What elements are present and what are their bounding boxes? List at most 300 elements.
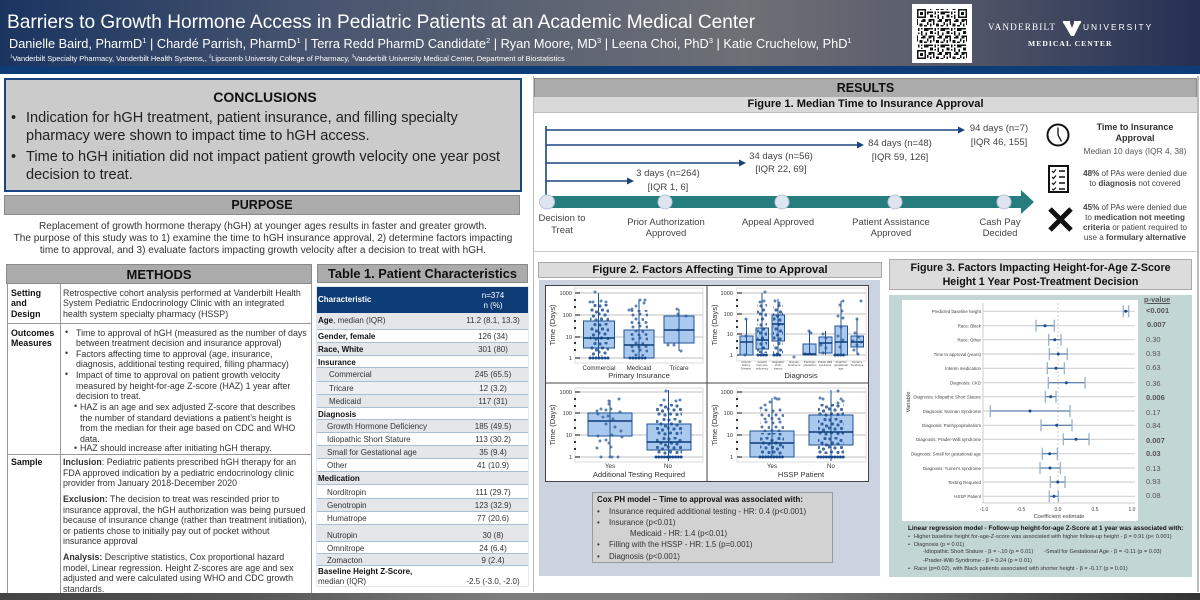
row: norditropin <box>317 485 528 499</box>
timeline value labels: [IQR 59, 126] <box>872 152 928 163</box>
outcomes list: • <box>65 348 68 358</box>
panel: methods heading <box>6 264 312 284</box>
variable labels: Testing Required <box>948 480 982 485</box>
chart: additional testing required: Additional Testing Required <box>593 470 685 479</box>
p-value list: <0.001 <box>1146 306 1169 315</box>
timeline value labels: Approved <box>646 228 686 239</box>
row: small for gestational age <box>317 446 528 459</box>
row: zomacton: 9 (2.4) <box>481 556 505 565</box>
variable labels: Race: Other <box>957 338 982 342</box>
denial diagnosis text: to diagnosis not covered <box>1089 179 1181 188</box>
chart: diagnosis: 1 <box>730 353 733 359</box>
chart: primary insurance: Commercial <box>582 365 616 372</box>
row: genotropin <box>317 499 528 512</box>
setting and design label: Setting <box>11 288 41 298</box>
row: commercial: 245 (65.5) <box>475 370 511 379</box>
point estimates <box>1030 311 1126 496</box>
timeline value labels: Treat <box>551 225 573 236</box>
outcomes list: diagnosis, additional testing required, filling pharmacy) <box>76 359 289 369</box>
purpose text: time to approval, and 3) evaluate factors impacting growth velocity after a decision to treat with hGH. <box>40 245 486 256</box>
chart: primary insurance: Primary Insurance <box>608 371 670 380</box>
chart: diagnosis: Noonan <box>789 360 799 364</box>
time to approval text <box>1084 122 1186 156</box>
teal timeline arrow <box>546 190 1034 214</box>
chart: diagnosis: Idiopathic <box>772 360 785 364</box>
panel: purpose heading: PURPOSE <box>231 198 293 212</box>
setting and design text <box>63 288 301 319</box>
sample label: Sample <box>11 457 42 467</box>
chart: diagnosis <box>710 288 866 380</box>
chart: HSSP patient <box>710 388 866 479</box>
regression bullets: Race (p=0.02), with Black patients associated with shorter height - β = -0.17 (p = 0.01) <box>914 566 1128 572</box>
p-value list: 0.08 <box>1146 491 1161 500</box>
figure 2 heading: Figure 2. Factors Affecting Time to Approval <box>592 264 828 276</box>
chart: diagnosis: Chronic <box>741 360 751 364</box>
row: nutropin: 30 (8) <box>483 531 503 540</box>
timeline value labels: 3 days (n=264) <box>636 168 700 179</box>
sample text: Inclusion: Pediatric patients prescribed hGH therapy for an <box>63 457 296 467</box>
row: nutropin <box>317 525 528 542</box>
p-value list: 0.03 <box>1146 449 1161 458</box>
sample text: insurance approval, the hGH authorization was being pursued <box>63 504 305 514</box>
p-value heading: p-value <box>1144 295 1170 304</box>
row: gender <box>317 330 528 343</box>
panel: results heading <box>534 78 1197 98</box>
chart: diagnosis: hormone <box>756 363 768 367</box>
chart: diagnosis: Small for <box>835 360 847 364</box>
row: idiopathic short stature: 113 (30.2) <box>475 435 511 444</box>
chart: diagnosis: 100 <box>724 312 733 318</box>
row: zomacton <box>317 554 528 566</box>
figure 3 heading: Figure 3. Factors Impacting Height-for-Age Z-Score <box>910 262 1171 274</box>
regression bullets: • <box>908 534 910 540</box>
Cox model callout <box>592 492 833 563</box>
p-value list: 0.006 <box>1146 393 1165 402</box>
row: tricare <box>317 382 528 395</box>
timeline value labels: 94 days (n=7) <box>970 123 1028 134</box>
outcomes list: Factors affecting time to approval (age, insurance, <box>76 349 272 359</box>
row: baseline height: Baseline Height Z-Score, <box>318 567 412 576</box>
outcomes label <box>11 328 54 348</box>
row: insurance: Insurance <box>318 358 356 367</box>
row: age: Age, median (IQR) <box>318 316 386 325</box>
Cox model callout: Filling with the HSSP - HR: 1.5 (p=0.001) <box>609 540 752 549</box>
row: medicaid <box>317 395 528 408</box>
setting and design text: System Pediatric Endocrinology Clinic with an integrated <box>63 298 284 308</box>
row: zomacton: Zomacton <box>327 556 363 565</box>
row: tricare: Tricare <box>329 384 354 393</box>
x axis labels: -0.5 <box>1017 507 1026 513</box>
chart: primary insurance: Time (Days) <box>548 304 557 346</box>
y axis title: Variable <box>906 392 912 412</box>
time to approval text: Time to Insurance <box>1097 122 1173 132</box>
outcomes list: measured by height-for-age Z-score (HAZ) 1 year after <box>76 380 290 390</box>
x axis labels: 0.0 <box>1055 507 1062 513</box>
p-value column <box>1144 295 1170 500</box>
Cox model callout: • <box>597 540 600 549</box>
x axis labels <box>980 507 1136 513</box>
sample text: Analysis: Descriptive statistics, Cox proportional hazard <box>63 552 284 562</box>
chart: primary insurance: Tricare <box>669 365 689 372</box>
timeline value labels: 84 days (n=48) <box>868 138 932 149</box>
timeline value labels <box>538 123 1028 239</box>
linear regression summary <box>908 524 1183 572</box>
panel frame rule under figure 1 <box>534 251 1197 252</box>
logo word University: UNIVERSITY <box>1083 22 1153 32</box>
chart: HSSP patient: No <box>827 463 836 470</box>
conclusions bullets: pharmacy were shown to impact time to hGH access. <box>26 128 370 144</box>
affiliations: 1Vanderbilt Specialty Pharmacy, Vanderbilt Health Systems,, 2Lipscomb University College of Pharmacy, 3Vanderbilt University Medical Center, Department of Biostatistics <box>10 53 565 63</box>
sample text: or patients chose to initially pay out of pocket without <box>63 526 269 536</box>
chart: additional testing required <box>548 388 703 479</box>
icon: X mark <box>1048 207 1073 232</box>
p-value list: 0.007 <box>1146 436 1165 445</box>
figure 1 heading <box>534 97 1197 113</box>
outcomes list: HAZ should increase after initiating hGH therapy. <box>80 443 272 453</box>
row: diagnosis: Diagnosis <box>318 410 356 419</box>
row: other: 41 (10.9) <box>477 461 509 470</box>
chart: additional testing required: 100 <box>563 411 572 417</box>
setting and design label: and <box>11 298 27 308</box>
chart: additional testing required: 10 <box>566 433 572 439</box>
sample text: because of insurance change (rather than treatment initiation), <box>63 515 307 525</box>
chart: diagnosis: 10 <box>727 332 733 338</box>
conclusions bullets: decision to treat. <box>26 167 133 183</box>
regression heading: Linear regression model - Follow-up height-for-age Z-Score at 1 year was associated with: <box>908 524 1183 532</box>
denial criteria text: use a formulary alternative <box>1084 233 1186 242</box>
row: insurance <box>317 356 528 368</box>
p-value list: 0.13 <box>1146 464 1161 473</box>
row: gender: Gender, female <box>318 332 375 341</box>
logo word Medical Center: MEDICAL CENTER <box>1028 39 1113 48</box>
variable labels: HSSP Patient <box>954 494 982 499</box>
denial criteria text: to medication not meeting <box>1085 213 1185 222</box>
row: diagnosis <box>317 408 528 420</box>
Cox model callout: • <box>597 552 600 561</box>
outcomes label: Measures <box>11 338 52 348</box>
timeline value labels: [IQR 1, 6] <box>648 182 688 193</box>
row: growth hormone deficiency <box>317 420 528 433</box>
row: medicaid: Medicaid <box>329 397 361 406</box>
row: medication: Medication <box>318 474 360 483</box>
table 1 <box>317 287 528 586</box>
row: tricare: 12 (3.2) <box>479 384 507 393</box>
sample text: insurance approval <box>63 536 138 546</box>
row: omnitrope: Omnitrope <box>327 544 364 553</box>
regression bullets: -Idiopathic Short Stature - β = -.10 (p = 0.01) <box>923 549 1033 555</box>
chart: primary insurance: 1 <box>569 356 572 362</box>
row: small for gestational age: Small for Gestational age <box>327 448 417 457</box>
variable labels <box>911 309 982 499</box>
conclusions bullets <box>11 110 500 183</box>
purpose text: The purpose of this study was to 1) examine the time to hGH insurance approval, 2) determine factors impacting <box>14 233 512 244</box>
outcomes list: • <box>74 443 77 453</box>
figure 2 heading <box>538 262 882 278</box>
row: age <box>317 313 528 330</box>
panel: results heading: RESULTS <box>837 81 894 95</box>
table header <box>317 287 528 313</box>
row: idiopathic short stature: Idiopathic Short Stature <box>327 435 411 444</box>
conclusions bullets: Indication for hGH treatment, patient insurance, and filling specialty <box>26 110 458 126</box>
authors: Danielle Baird, PharmD1 | Chardé Parrish, PharmD1 | Terra Redd PharmD Candidate2 | Ryan Moore, MD3 | Leena Choi, PhD3 | Katie Cruchelow, PhD1 <box>9 35 852 51</box>
table header: n=374 <box>482 291 504 300</box>
chart: additional testing required: 1000 <box>560 390 572 396</box>
variable labels: Diagnosis: Noonan Syndrome <box>923 409 982 414</box>
panel frame lines <box>545 285 869 482</box>
chart: diagnosis: stature <box>774 366 783 370</box>
variable labels: Diagnosis: Prader-Willi syndrome <box>916 437 982 442</box>
outcomes list: data. <box>80 434 100 444</box>
outcomes list <box>65 327 307 453</box>
time to approval text: Approval <box>1115 133 1154 143</box>
row: commercial: Commercial <box>329 370 372 379</box>
figure 1 timeline <box>538 123 1034 239</box>
chart: diagnosis: Time (Days) <box>710 304 719 346</box>
outcomes list: • <box>65 369 68 379</box>
variable labels: Diagnosis: Panhypopituitarism <box>922 423 981 428</box>
regression bullets <box>908 534 1172 572</box>
figure 1 heading: Figure 1. Median Time to Insurance Approval <box>747 98 984 110</box>
figure 3 heading: Height 1 Year Post-Treatment Decision <box>943 276 1138 288</box>
column divider <box>60 284 61 593</box>
p-value list: 0.30 <box>1146 335 1161 344</box>
setting and design label: Design <box>11 309 40 319</box>
row: norditropin: 111 (29.7) <box>475 488 511 497</box>
sample text <box>63 457 307 594</box>
sample text: provider from January 2018-December 2020 <box>63 478 237 488</box>
conclusions bullets: • <box>11 149 16 165</box>
sample text: model, Linear regression. Height Z-scores are age and sex <box>63 562 294 572</box>
regression bullets: -Small for Gestational Age - β = -0.11 (p = 0.03) <box>1044 549 1162 555</box>
row: age: 11.2 (8.1, 13.3) <box>466 316 520 325</box>
Cox model callout: • <box>597 507 600 516</box>
chart: diagnosis: syndrome <box>819 363 832 367</box>
x axis title: Coefficient estimate <box>1034 514 1084 520</box>
p-value list: 0.84 <box>1146 421 1161 430</box>
sample text: adjusted and were calculated using WHO and CDC growth <box>63 573 293 583</box>
chart: diagnosis: Turner's <box>852 360 863 364</box>
panel: figure 2 background <box>539 280 880 576</box>
chart: primary insurance: Medicaid <box>627 365 652 372</box>
chart: HSSP patient: 1000 <box>721 390 733 396</box>
variable labels: Race: Black <box>958 324 982 328</box>
figure 2 box plots <box>545 285 869 482</box>
row rule 1 <box>8 323 311 324</box>
chart: diagnosis: Panhypo- <box>804 360 816 364</box>
chart: primary insurance: 100 <box>563 313 572 319</box>
row: humatrope <box>317 512 528 525</box>
row: gender: 126 (34) <box>478 332 508 341</box>
timeline value labels: [IQR 46, 155] <box>971 137 1027 148</box>
row: humatrope: Humatrope <box>327 514 367 523</box>
row: norditropin: Norditropin <box>327 488 366 497</box>
Cox model callout: Cox PH model – Time to approval was associated with: <box>597 495 803 504</box>
logo word Vanderbilt: VANDERBILT <box>988 22 1056 32</box>
x axis labels: -1.0 <box>980 507 989 513</box>
chart: diagnosis: Disease <box>741 366 751 370</box>
outcomes list: the number of standard deviations a patient’s height is <box>80 413 292 423</box>
plot gridlines <box>983 311 1135 496</box>
chart: diagnosis: pituitarism <box>804 363 817 367</box>
right edge rule <box>1197 76 1199 592</box>
divider left of results <box>533 76 534 592</box>
outcomes label: Outcomes <box>11 328 54 338</box>
chart: HSSP patient: 10 <box>727 433 733 439</box>
timeline value labels: Decision to <box>538 213 586 224</box>
header banner <box>0 0 1200 74</box>
variable labels: Time to approval (years) <box>934 352 982 357</box>
chart: primary insurance: 1000 <box>560 291 572 297</box>
logo V mark <box>1063 21 1081 36</box>
chart: diagnosis: kidney <box>742 363 751 367</box>
timeline value labels: Cash Pay <box>979 217 1021 228</box>
row: baseline height: median (IQR) <box>318 576 366 586</box>
Cox model callout: • <box>597 518 600 527</box>
outcomes list: between treatment decision and insurance approval) <box>76 338 282 348</box>
chart: diagnosis: Syndrome <box>851 363 864 367</box>
panel: table 1 heading: Table 1. Patient Characteristics <box>328 266 517 281</box>
row: humatrope: 77 (20.6) <box>477 514 509 523</box>
setting and design text: health system specialty pharmacy (HSSP) <box>63 309 228 319</box>
chart: HSSP patient: HSSP Patient <box>778 470 825 479</box>
p-value list: 0.36 <box>1146 379 1161 388</box>
title: Barriers to Growth Hormone Access in Pediatric Patients at an Academic Medical Center <box>7 12 755 33</box>
chart: HSSP patient: 1 <box>730 455 733 461</box>
panel: methods table <box>7 284 312 593</box>
chart: additional testing required: Time (Days) <box>548 404 557 446</box>
timeline milestones <box>540 195 1011 209</box>
sample text: Exclusion: The decision to treat was rescinded prior to <box>63 494 279 504</box>
chart: diagnosis: age <box>839 366 844 370</box>
chart: diagnosis: Growth <box>757 360 767 364</box>
figure 3 heading <box>889 259 1192 290</box>
outcomes list: • <box>65 327 68 337</box>
timeline value labels: Decided <box>983 228 1017 239</box>
row: growth hormone deficiency: 185 (49.5) <box>475 422 511 431</box>
row: growth hormone deficiency: Growth Hormone Deficiency <box>327 422 427 431</box>
chart: diagnosis: Syndrome <box>788 363 801 367</box>
chart: HSSP patient: Yes <box>767 463 777 470</box>
chart: diagnosis: 1000 <box>721 291 733 297</box>
icon: clock <box>1046 124 1070 146</box>
conclusions bullets: • <box>11 110 16 126</box>
chart: diagnosis: short <box>775 363 781 367</box>
zero line <box>1057 303 1059 503</box>
panel: methods heading: METHODS <box>126 267 192 282</box>
icon: checklist <box>1048 165 1069 193</box>
chart: primary insurance <box>548 288 703 380</box>
row: other: Other <box>327 461 347 470</box>
timeline value labels: Patient Assistance <box>852 217 930 228</box>
denial diagnosis text: 48% of PAs were denied due <box>1083 169 1187 178</box>
p-value list: 0.93 <box>1146 349 1161 358</box>
setting and design text: Retrospective cohort analysis performed at Vanderbilt Health <box>63 288 301 298</box>
arrows of median time <box>546 126 965 196</box>
outcomes list: HAZ is an age and sex adjusted Z-score that describes <box>80 402 295 412</box>
chart: diagnosis: Prader Willi <box>818 360 833 364</box>
outcomes list: Impact of time to approval on patient growth velocity <box>76 370 280 380</box>
regression bullets: • <box>908 542 910 548</box>
p-value list: 0.007 <box>1147 320 1166 329</box>
row rule 2 <box>8 454 311 455</box>
row: small for gestational age: 35 (9.4) <box>479 448 507 457</box>
chart: diagnosis: Diagnosis <box>784 371 818 380</box>
timeline value labels: Approved <box>871 228 911 239</box>
sample text: standards. <box>63 584 104 594</box>
row: medicaid: 117 (31) <box>478 397 508 406</box>
variable labels: Diagnosis: CKD <box>950 380 981 386</box>
timeline value labels: Prior Authorization <box>627 217 705 228</box>
panel: figure 3 background <box>889 295 1192 577</box>
table header: n (%) <box>483 301 503 310</box>
row: baseline height: -2.5 (-3.0, -2.0) <box>466 577 520 586</box>
outcomes list: • <box>74 401 77 411</box>
purpose text <box>14 221 512 256</box>
p-value list: 0.17 <box>1146 408 1161 417</box>
setting and design label <box>11 288 41 319</box>
panel: conclusions <box>4 78 522 192</box>
chart: diagnosis: deficiency <box>756 366 769 370</box>
chart: primary insurance: 10 <box>566 335 572 341</box>
timeline value labels: Appeal Approved <box>742 217 814 228</box>
variable labels: Diagnosis: Turner's syndrome <box>923 466 982 471</box>
sample text: FDA approved indication by a pediatric endocrinology clinic <box>63 468 294 478</box>
variable labels: Predicted baseline height <box>932 309 982 314</box>
timeline value labels: [IQR 22, 69] <box>755 164 807 175</box>
denial criteria text <box>1083 203 1187 242</box>
variable labels: Diagnosis: Small for gestational age <box>911 452 982 456</box>
regression bullets: -Prader-Willi Syndrome - β = 0.24 (p = 0.01) <box>923 558 1032 564</box>
chart: diagnosis: gestational <box>834 363 848 367</box>
plot frame <box>983 303 1135 503</box>
variable labels: Diagnosis: Idiopathic Short Stature <box>913 394 982 400</box>
row: medication <box>317 472 528 485</box>
x axis labels: 0.5 <box>1092 507 1099 513</box>
regression bullets: Higher baseline height for-age-Z-score was associated with higher follow-up height - β = 0.91 (p< 0.001) <box>914 534 1172 540</box>
timeline value labels: 34 days (n=56) <box>749 151 813 162</box>
row: genotropin: 123 (32.9) <box>475 501 511 510</box>
row: nutropin: Nutropin <box>327 531 357 540</box>
row: race: 301 (80) <box>478 345 508 354</box>
Cox model callout: Medicaid - HR: 1.4 (p<0.01) <box>630 529 727 538</box>
row: baseline height <box>318 567 520 586</box>
Vanderbilt logo <box>988 21 1153 48</box>
Cox model callout: Diagnosis (p<0.001) <box>609 552 680 561</box>
interval caps <box>990 305 1129 502</box>
p-value list <box>1146 306 1169 500</box>
chart: HSSP patient: 100 <box>724 411 733 417</box>
regression bullets: • <box>908 566 910 572</box>
conclusions heading: CONCLUSIONS <box>213 89 317 105</box>
row: commercial <box>317 368 528 382</box>
footer bar <box>0 593 1200 600</box>
panel: figure 1 key facts <box>1046 122 1187 242</box>
denial criteria text: criteria or patient required to <box>1083 223 1187 232</box>
variable labels: Interim medication <box>945 366 982 371</box>
row: other <box>317 459 528 472</box>
x axis labels: 1.0 <box>1129 507 1136 513</box>
denial diagnosis text <box>1083 169 1187 188</box>
chart: additional testing required: Yes <box>605 463 615 470</box>
time to approval text: Median 10 days (IQR 4, 38) <box>1084 146 1186 156</box>
row: race <box>317 343 528 356</box>
panel: purpose heading <box>4 195 520 215</box>
purpose text: Replacement of growth hormone therapy (hGH) at younger ages results in faster and greater growth. <box>39 221 487 232</box>
p-value list: 0.63 <box>1146 363 1161 372</box>
row: omnitrope: 24 (6.4) <box>479 544 507 553</box>
row: idiopathic short stature <box>317 433 528 446</box>
row: race: Race, White <box>318 345 363 354</box>
